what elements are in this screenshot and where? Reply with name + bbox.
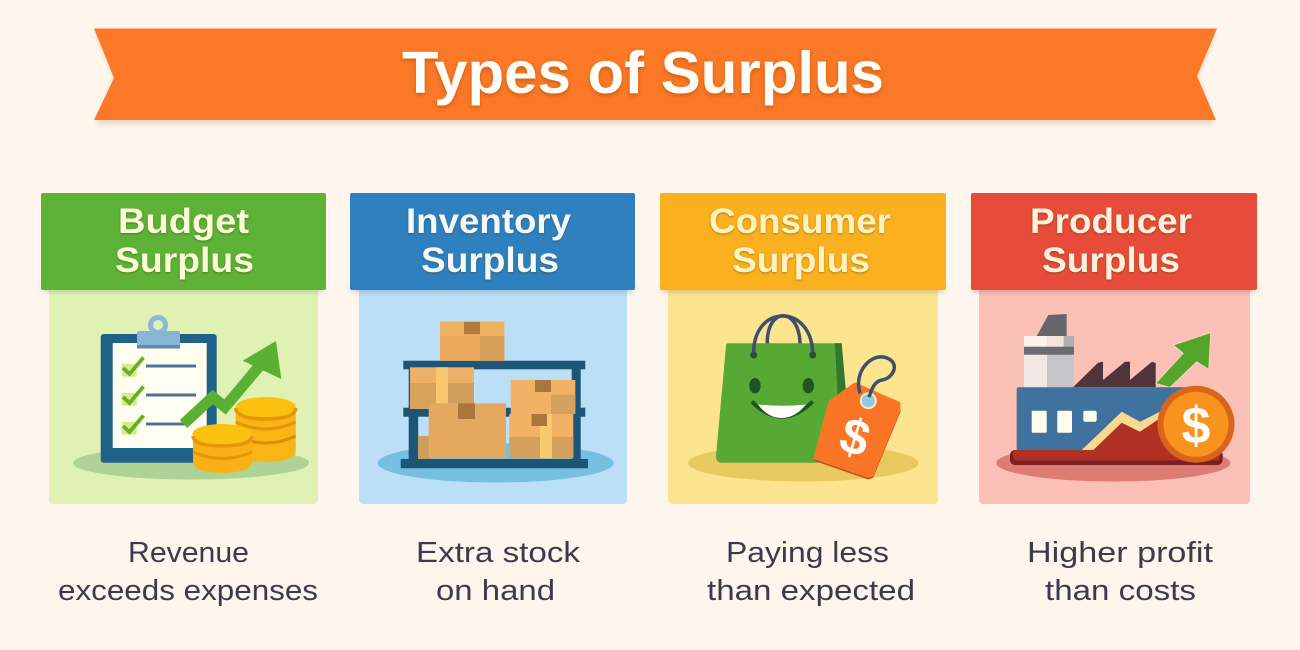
panel: consumer surplus [660, 193, 946, 607]
caption: consumer surplus: Paying less [726, 537, 889, 569]
heading: producer surplus [1030, 202, 1192, 280]
heading: budget surplus [115, 202, 254, 280]
caption: inventory surplus [416, 537, 581, 607]
caption: producer surplus: than costs [1045, 575, 1196, 607]
heading: inventory surplus: Surplus [421, 241, 559, 280]
icon: factory with rising arrow and coin [996, 314, 1234, 482]
heading: producer surplus: Surplus [1042, 241, 1180, 280]
caption: inventory surplus: on hand [436, 575, 555, 607]
heading: consumer surplus: Surplus [732, 241, 870, 280]
caption: budget surplus [58, 537, 318, 607]
icon: dollar sign on tag: $ [834, 406, 877, 468]
panel: producer surplus [971, 193, 1257, 607]
heading: budget surplus: Budget [118, 202, 249, 241]
heading: inventory surplus [406, 202, 572, 280]
caption: inventory surplus: Extra stock [416, 537, 581, 569]
caption: producer surplus [1027, 537, 1213, 607]
heading: budget surplus: Surplus [115, 241, 254, 280]
heading: consumer surplus [709, 202, 891, 280]
icon: clipboard, coins and arrow [73, 318, 309, 480]
heading: consumer surplus: Consumer [709, 202, 891, 241]
panel: budget surplus [41, 193, 326, 607]
title: Types of Surplus [402, 40, 884, 106]
icon: shopping bag with price tag [688, 316, 919, 482]
caption: consumer surplus [707, 537, 915, 607]
caption: budget surplus: exceeds expenses [58, 575, 318, 607]
heading: inventory surplus: Inventory [406, 202, 572, 241]
icon: shelves with boxes [378, 322, 614, 482]
caption: producer surplus: Higher profit [1027, 537, 1213, 569]
icon: dollar sign on coin: $ [1182, 397, 1211, 455]
caption: consumer surplus: than expected [707, 575, 915, 607]
heading: producer surplus: Producer [1030, 202, 1192, 241]
panel: inventory surplus [350, 193, 635, 607]
title banner [94, 28, 1217, 124]
caption: budget surplus: Revenue [128, 537, 249, 569]
